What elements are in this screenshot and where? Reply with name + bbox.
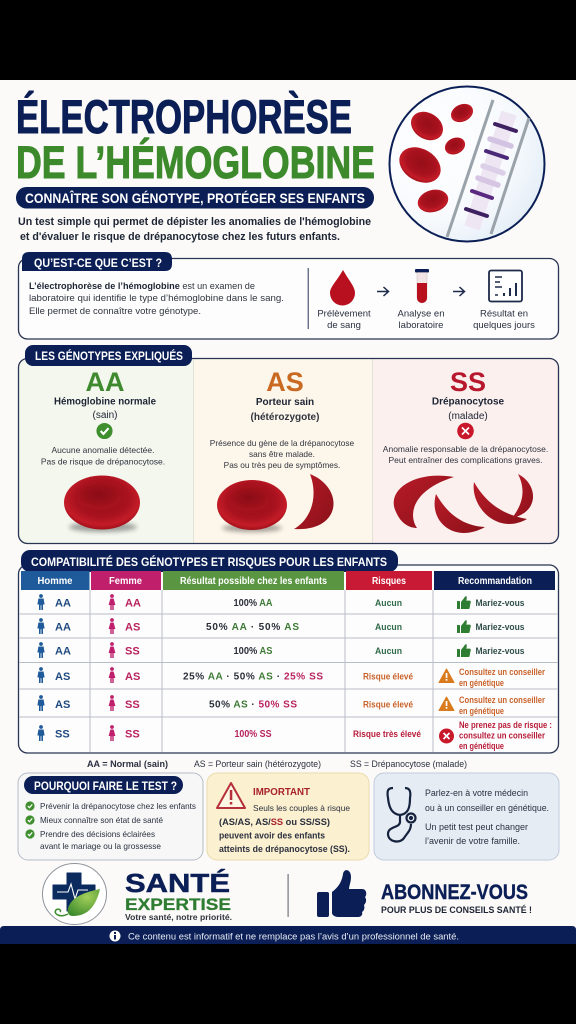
subtitle pill [16,187,374,208]
row: SS x SS: 100% SS [234,729,272,740]
row: SS x SS: SS [125,728,140,740]
row: SS x SS: SS [55,728,70,740]
column: AA: Pas de risque de drépanocytose. [41,456,165,466]
benefits list: Prendre des décisions éclairées [40,829,155,839]
heading: les génotypes expliqués: LES GÉNOTYPES EXPLIQUÉS [35,350,183,363]
row: AS x SS: SS [125,699,140,711]
footer disclaimer bar [0,926,576,944]
legend [87,759,467,769]
row: AA x SS [37,642,525,658]
intro text [18,216,371,243]
icon: warning triangle [217,783,245,808]
title: ÉLECTROPHORÈSE [16,90,352,143]
row: AS x SS: 50% AS · 50% SS [209,700,297,710]
column: SS: Drépanocytose [432,396,505,408]
description text: L’électrophorèse de l’hémoglobine est un examen de [29,281,255,292]
row: AA x AA: 100% AA [234,598,272,609]
column: AS: (hétérozygote) [251,412,319,423]
row: AS x SS: AS [55,699,70,711]
row: AA x SS: SS [125,646,140,658]
column: AA: Aucune anomalie détectée. [51,445,155,455]
row: AS x SS: en génétique [459,706,504,716]
description text: Elle permet de connaître votre génotype. [29,306,201,317]
row: AA x AS [37,618,525,634]
logo: santé expertise [42,864,232,924]
column: AA: Hémoglobine normale [54,396,156,408]
column: AS: sans être malade. [249,449,315,459]
important text: Seuls les couples à risque [253,803,350,813]
panel: important [207,773,369,860]
benefits list [25,801,196,851]
panel: qu'est-ce que c'est [18,252,558,339]
row: AA x AA: Aucun [375,598,402,609]
row: AS x AS: AS [125,671,140,683]
step labels: Analyse en [397,308,445,320]
row: SS x SS [37,720,552,751]
row: SS x SS: Risque très élevé [353,729,421,740]
panel: pourquoi faire le test [18,773,203,860]
heading: compatibilité [21,550,398,572]
step labels: de sang [327,320,361,331]
icon: stethoscope [388,788,416,841]
row: AS x SS [37,695,545,716]
advice text: ou à un conseiller en génétique. [425,803,549,813]
benefits list: Mieux connaître son état de santé [40,815,163,825]
row: AS x SS: Risque élevé [363,700,413,710]
column: SS [383,367,548,533]
column: SS: (malade) [448,411,488,422]
step labels: laboratoire [399,320,443,331]
table header: Risques [372,575,406,587]
row: AA x AA: AA [55,598,71,610]
step labels: Résultat en [480,308,528,320]
row: AS x AS: en génétique [459,678,504,688]
heading: compatibilité: COMPATIBILITÉ DES GÉNOTYPES ET RISQUES POUR LES ENFANTS [31,554,387,569]
title: DE L’HÉMOGLOBINE [16,137,375,188]
table header: Homme [38,575,73,587]
icon: test tube [415,269,429,303]
arrow [453,287,464,296]
logo: santé expertise: Votre santé, notre priorité. [125,912,232,922]
description text: laboratoire qui identifie le type d’hémoglobine dans le sang. [29,293,284,304]
column: AS [210,367,355,532]
row: AA x AS: Mariez-vous [476,622,524,632]
row: SS x SS: en génétique [459,741,504,751]
row: AA x AA: Mariez-vous [476,598,524,608]
table header [21,571,555,590]
important text: IMPORTANT [253,786,311,798]
intro text: et d'évaluer le risque de drépanocytose chez les futurs enfants. [20,231,340,243]
step labels: quelques jours [473,320,535,331]
heading: qu'est-ce que c'est [22,252,172,271]
legend: AA = Normal (sain) [87,759,168,769]
column: AS: Porteur sain [256,397,314,408]
row: AS x AS: 25% AA · 50% AS · 25% SS [183,672,323,682]
legend: SS = Drépanocytose (malade) [350,759,467,769]
row: AA x AS: AA [55,622,71,634]
step labels [317,308,535,331]
logo: santé expertise: EXPERTISE [125,895,231,914]
title [16,90,375,188]
arrow [377,287,388,296]
row: AA x SS: Aucun [375,646,402,657]
heading: qu'est-ce que c'est: QU’EST-CE QUE C’EST ? [34,258,162,270]
step labels: Prélèvement [317,308,371,320]
call to action: abonnez-vous: POUR PLUS DE CONSEILS SANTÉ ! [381,905,532,915]
advice text: Parlez-en à votre médecin [425,788,528,798]
row: AA x SS: AA [55,646,71,658]
row: AS x SS: Consultez un conseiller [459,695,545,705]
row: SS x SS: Ne prenez pas de risque : [459,720,552,730]
row: AA x AS: AS [125,622,140,634]
important text [219,786,350,855]
advice text: Un petit test peut changer [425,822,528,832]
panel: compatibility table [18,550,558,753]
row: AA x AA: AA [125,598,141,610]
heading: pourquoi faire le test [24,776,183,794]
important text: atteints de drépanocytose (SS). [219,844,350,855]
icon: blood drop [330,270,355,305]
table header: Recommandation [458,575,532,587]
row: AS x AS: Risque élevé [363,672,413,682]
footer disclaimer bar: Ce contenu est informatif et ne remplace pas l’avis d’un professionnel de santé. [128,932,459,942]
column: SS: Anomalie responsable de la drépanocytose. [383,444,548,454]
illustration: blood cells and electrophoresis strip [390,86,544,242]
heading: les génotypes expliqués [25,345,192,366]
advice text [425,788,549,846]
column: AS: Pas ou très peu de symptômes. [224,460,340,470]
heading: pourquoi faire le test: POURQUOI FAIRE LE TEST ? [34,779,177,793]
column: AS: AS [266,367,304,397]
table header: Femme [109,575,142,587]
icon: results report [489,270,522,302]
call to action: abonnez-vous [317,870,532,917]
panel: parlez-en à votre médecin [374,773,559,860]
column: SS: Peut entraîner des complications graves. [388,455,543,465]
logo: santé expertise: SANTÉ [125,868,230,898]
row: AA x SS: 100% AS [234,646,273,657]
legend: AS = Porteur sain (hétérozygote) [194,759,321,769]
important text: (AS/AS, AS/SS ou SS/SS) [219,817,330,828]
benefits list: avant le mariage ou la grossesse [40,841,161,851]
row: AS x AS [37,667,545,688]
column: AA [41,367,165,532]
subtitle pill: CONNAÎTRE SON GÉNOTYPE, PROTÉGER SES ENFANTS [25,189,365,206]
column: AA: (sain) [92,410,118,421]
column: AA: AA [86,367,124,397]
row: AA x AA [37,594,525,610]
column: AS: Présence du gène de la drépanocytose [210,438,355,448]
panel: les génotypes expliqués [18,345,558,544]
table header: Résultat possible chez les enfants [180,575,327,587]
row: AS x AS: Consultez un conseiller [459,667,545,677]
row: AS x AS: AS [55,671,70,683]
description text [29,281,284,317]
row: AA x AS: Aucun [375,622,402,633]
intro text: Un test simple qui permet de dépister les anomalies de l'hémoglobine [18,216,371,228]
row: AA x AS: 50% AA · 50% AS [206,622,299,633]
call to action: abonnez-vous: ABONNEZ-VOUS [381,881,528,904]
benefits list: Prévenir la drépanocytose chez les enfants [40,801,196,811]
important text: peuvent avoir des enfants [219,830,325,842]
row: SS x SS: consultez un conseiller [459,730,545,740]
advice text: l’avenir de votre famille. [425,836,520,846]
column: SS: SS [450,367,486,397]
row: AA x SS: Mariez-vous [476,646,524,656]
